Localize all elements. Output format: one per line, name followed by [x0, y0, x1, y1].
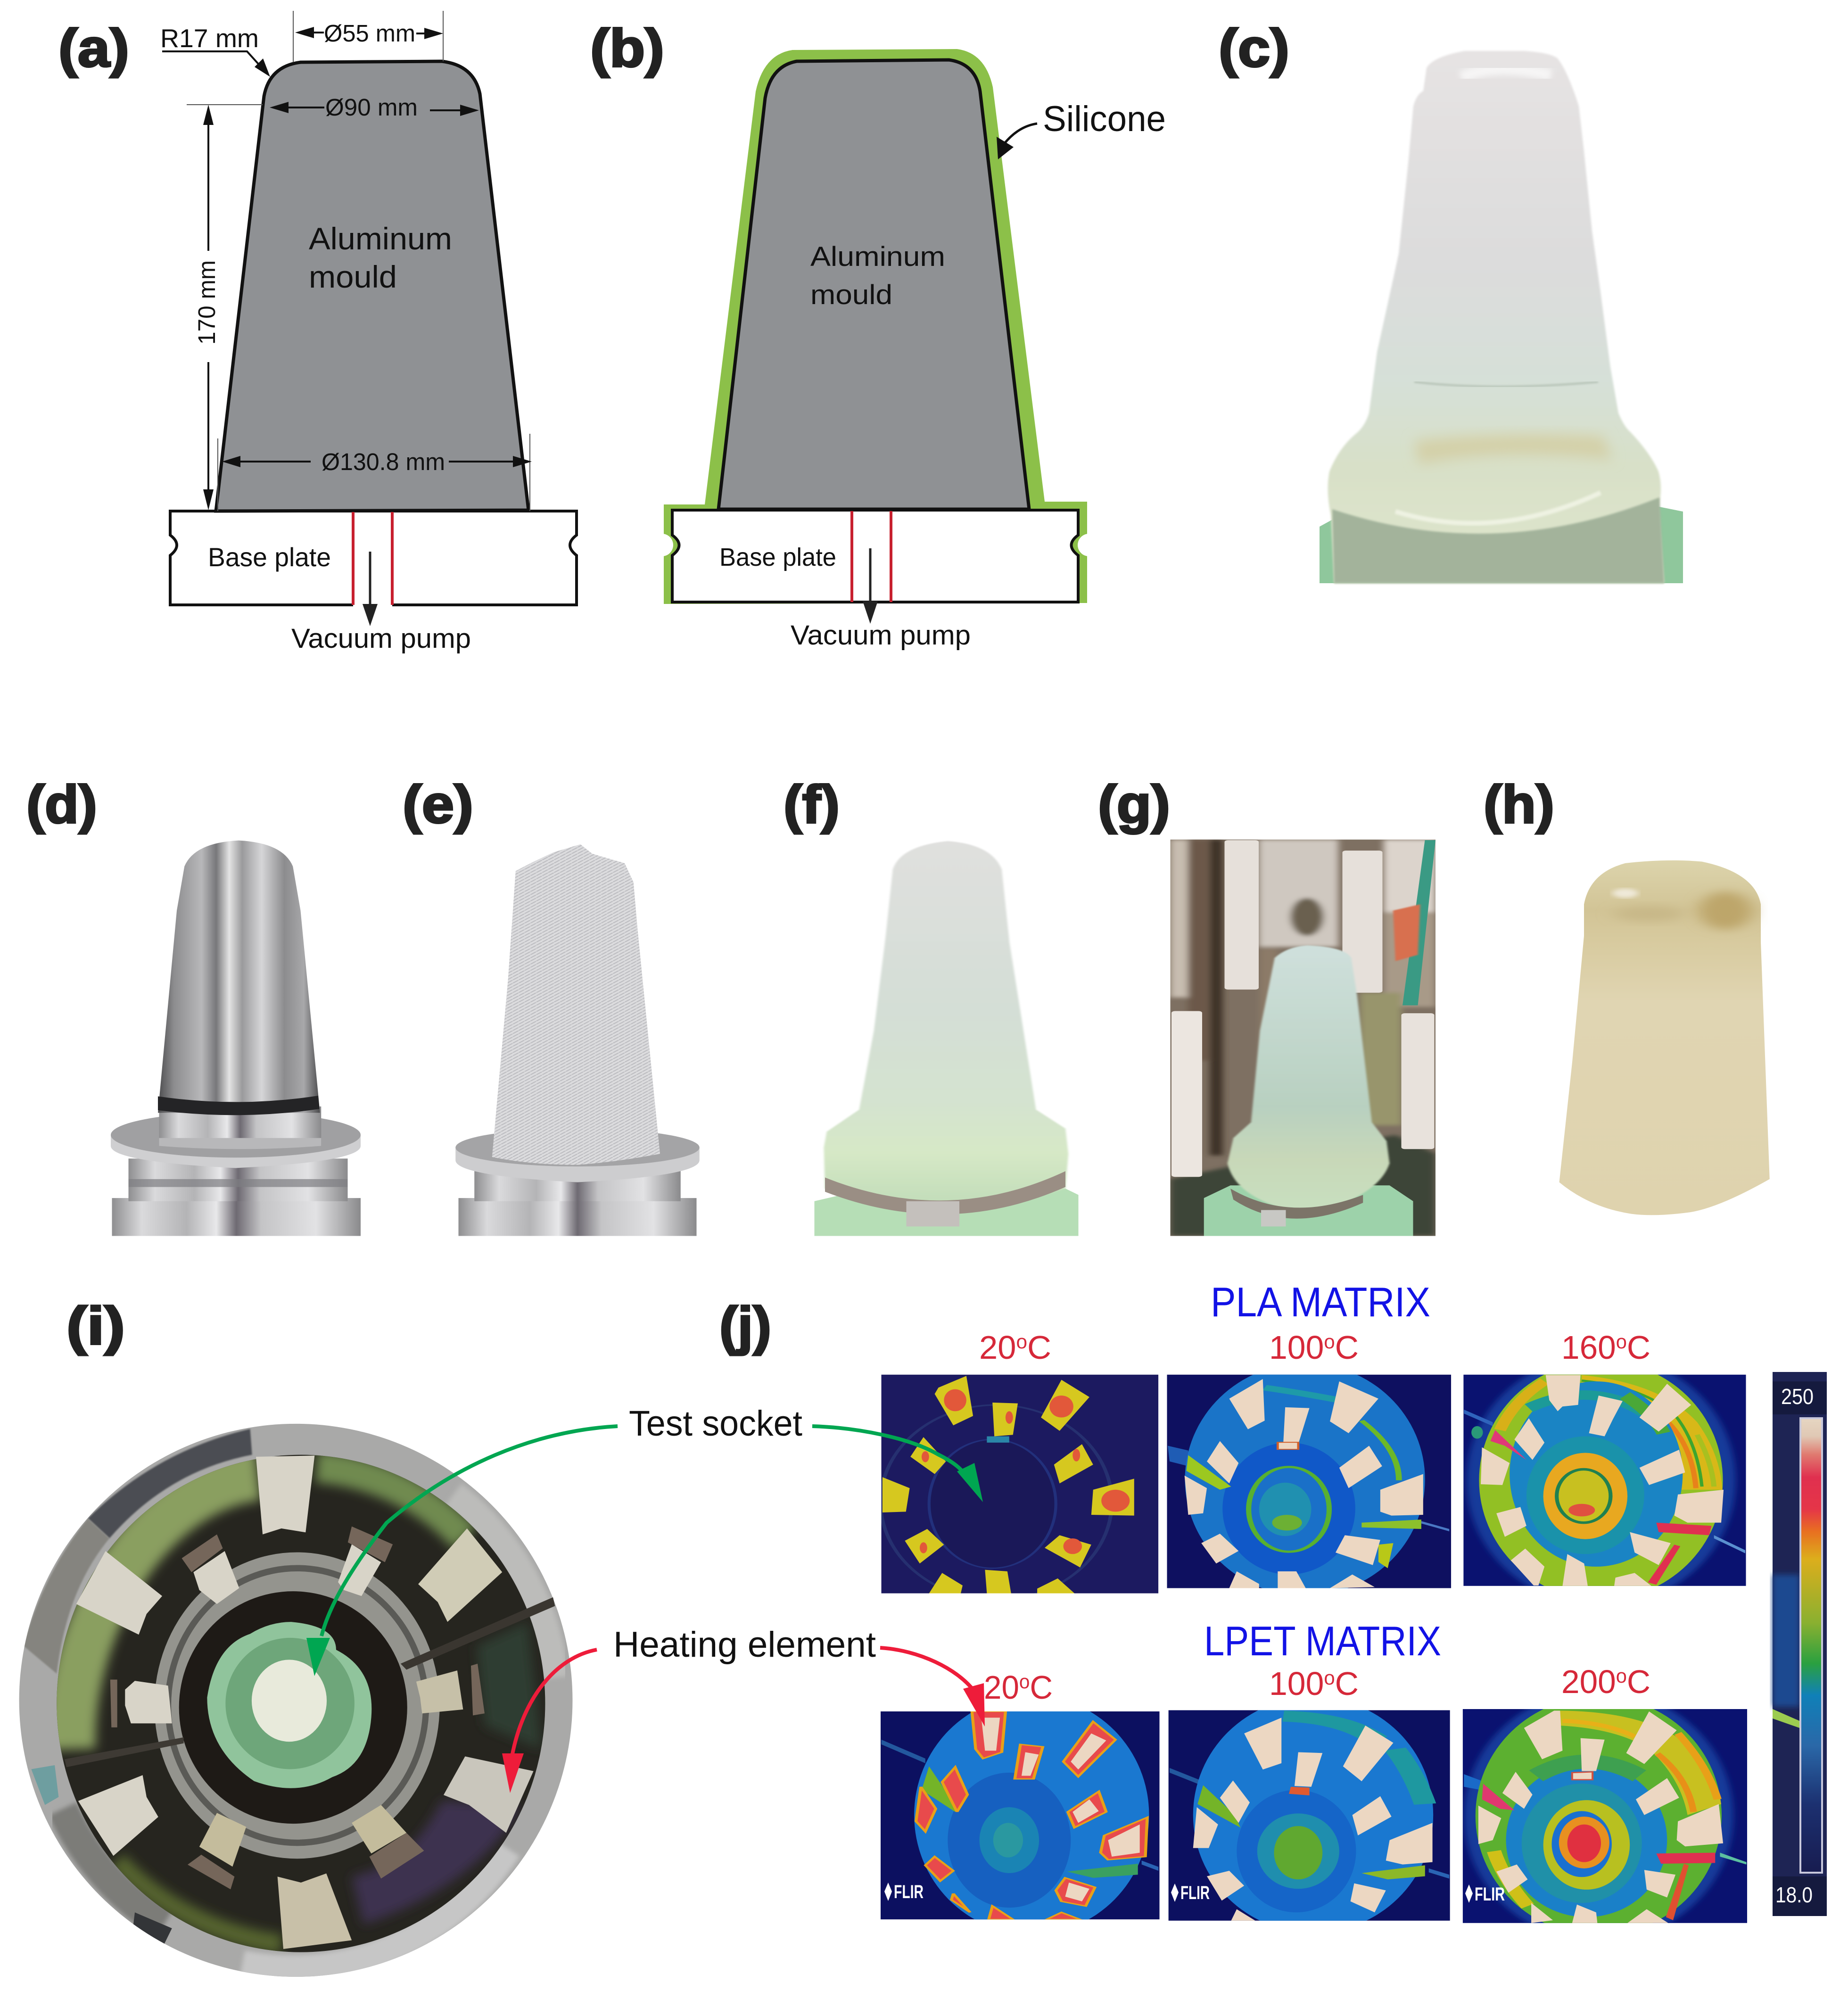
text: base plate: Base plate — [719, 543, 836, 571]
temperature labels PLA: o — [1324, 1330, 1335, 1353]
temperature labels LPET: o — [1019, 1670, 1030, 1693]
label h: (h) — [1484, 775, 1554, 834]
temperature labels PLA: o — [1016, 1330, 1027, 1353]
oven photo — [19, 1424, 572, 1977]
panel e: fabric on mould photo — [403, 775, 700, 1236]
label a: (a) — [58, 18, 129, 78]
inner back plates — [110, 1527, 485, 1889]
silicone body — [1328, 51, 1664, 583]
panel b: silicone over mould schematic — [590, 18, 1166, 651]
thermal image: PLA 20C — [881, 1375, 1158, 1600]
callout: heating element: Heating element — [613, 1625, 876, 1665]
panel h: cured socket photo — [1484, 775, 1770, 1215]
label f: (f) — [784, 775, 840, 834]
text: vacuum pump: Vacuum pump — [291, 623, 471, 654]
colour scale bar: 250 — [1781, 1384, 1814, 1409]
panel j: thermal images — [719, 1279, 1827, 1941]
text: base plate: Base plate — [208, 542, 331, 572]
arrow: green to thermal image — [812, 1426, 983, 1502]
lower grey-green skirt — [1332, 497, 1664, 583]
temperature labels LPET: 100 — [1269, 1665, 1324, 1702]
mould body — [216, 61, 528, 511]
label b: (b) — [590, 18, 664, 78]
temperature labels PLA: C — [1335, 1329, 1359, 1366]
silicone layer — [664, 49, 1087, 604]
dimension: R17 mm: R17 mm — [160, 24, 259, 53]
text: aluminum mould: Aluminum — [309, 221, 452, 256]
FLIR logo — [1465, 1884, 1505, 1905]
arrow: red to thermal image — [880, 1648, 985, 1727]
mould photo — [111, 841, 361, 1236]
temperature labels LPET: C — [1627, 1663, 1650, 1700]
text: aluminum mould: Aluminum — [810, 241, 945, 272]
temperature labels LPET — [984, 1663, 1650, 1706]
callout: test socket: Test socket — [629, 1404, 802, 1444]
FLIR logo: FLIR — [1180, 1883, 1210, 1903]
seam line — [1414, 382, 1598, 387]
notches in silicone — [651, 534, 1100, 556]
label d: (d) — [26, 775, 97, 834]
heading: LPET matrix: LPET MATRIX — [1204, 1618, 1441, 1664]
callout: test socket — [306, 1404, 983, 1676]
panel c: silicone bag photo — [1219, 18, 1683, 583]
arrow: red to photo — [502, 1650, 597, 1793]
highlight: shoulder ring — [1395, 493, 1600, 523]
heading: PLA matrix: PLA MATRIX — [1211, 1279, 1430, 1325]
temperature labels LPET: C — [1030, 1669, 1053, 1706]
green base — [1320, 507, 1683, 583]
colour scale bar — [1773, 1372, 1827, 1916]
panel d: bare mould photo — [26, 775, 361, 1236]
panel a: aluminum mould schematic — [58, 11, 577, 654]
temperature labels PLA: o — [1616, 1330, 1627, 1353]
temperature labels LPET: C — [1335, 1665, 1359, 1702]
thermal image: PLA 100C — [1167, 1363, 1451, 1596]
colour scale bar: 18.0 — [1775, 1883, 1813, 1907]
label j: (j) — [719, 1296, 771, 1355]
thermal image: LPET 20C — [881, 1711, 1160, 1920]
panel f: silicone on mould photo — [784, 775, 1079, 1236]
thermal image: LPET 100C — [1169, 1697, 1450, 1933]
heating elements — [76, 1455, 534, 1949]
dimension: 130.8 mm — [218, 434, 532, 511]
FLIR logo: FLIR — [1475, 1884, 1505, 1905]
vacuum channel — [353, 512, 392, 605]
dimension: 90 mm: Ø90 mm — [325, 94, 418, 121]
temperature labels PLA: C — [1627, 1329, 1650, 1366]
text: vacuum pump: Vacuum pump — [791, 620, 971, 651]
thermal image: LPET 200C — [1463, 1690, 1747, 1941]
dimension: 130.8 mm: Ø130.8 mm — [322, 448, 445, 475]
temperature labels PLA: 20 — [979, 1329, 1016, 1366]
FLIR logo: FLIR — [894, 1882, 924, 1902]
text and arrow: silicone — [997, 99, 1166, 159]
arrow: green to photo — [306, 1426, 618, 1676]
base plate — [672, 510, 1078, 602]
temperature labels LPET: o — [1324, 1667, 1335, 1689]
temperature labels LPET: 20 — [984, 1669, 1021, 1706]
label i: (i) — [66, 1296, 125, 1355]
text: aluminum mould: mould — [810, 280, 892, 310]
temperature labels PLA — [979, 1329, 1650, 1366]
arrow: vacuum — [863, 548, 878, 624]
temperature labels PLA: 160 — [1561, 1329, 1617, 1366]
text: aluminum mould: mould — [309, 259, 397, 294]
label g: (g) — [1098, 775, 1170, 834]
temperature labels PLA: 100 — [1269, 1329, 1324, 1366]
FLIR logo — [884, 1882, 924, 1902]
dimension: 170 mm: 170 mm — [193, 260, 220, 345]
base plate — [170, 511, 577, 605]
dimension: 55 mm — [293, 11, 443, 62]
text and arrow: silicone: Silicone — [1043, 99, 1166, 139]
panel i: oven top view photo — [19, 1296, 572, 1977]
callout: heating element — [502, 1625, 985, 1793]
FLIR logo — [1171, 1883, 1210, 1903]
temperature labels LPET: 200 — [1561, 1663, 1617, 1700]
label c: (c) — [1219, 18, 1289, 78]
text: aluminum mould — [810, 241, 945, 310]
mould body — [718, 60, 1029, 509]
dimension: 170 mm — [187, 105, 263, 510]
panel g: silicone inside oven photo — [1098, 775, 1436, 1236]
text: aluminum mould — [309, 221, 452, 294]
band: yellow tint — [1414, 435, 1612, 464]
vacuum channel — [852, 511, 891, 602]
bag photo — [815, 841, 1079, 1236]
temperature labels PLA: C — [1027, 1329, 1051, 1366]
dimension: R17 mm — [160, 24, 270, 77]
socket photo — [1559, 860, 1770, 1215]
label e: (e) — [403, 775, 473, 834]
dimension: 90 mm — [270, 94, 479, 121]
highlight: top edge — [1461, 69, 1551, 78]
temperature labels LPET: o — [1616, 1665, 1627, 1687]
dimension: 55 mm: Ø55 mm — [324, 20, 415, 47]
fabric photo — [455, 844, 700, 1236]
oven photo — [1170, 840, 1436, 1236]
thermal image: PLA 160C — [1463, 1375, 1746, 1586]
arrow: vacuum — [363, 552, 378, 626]
